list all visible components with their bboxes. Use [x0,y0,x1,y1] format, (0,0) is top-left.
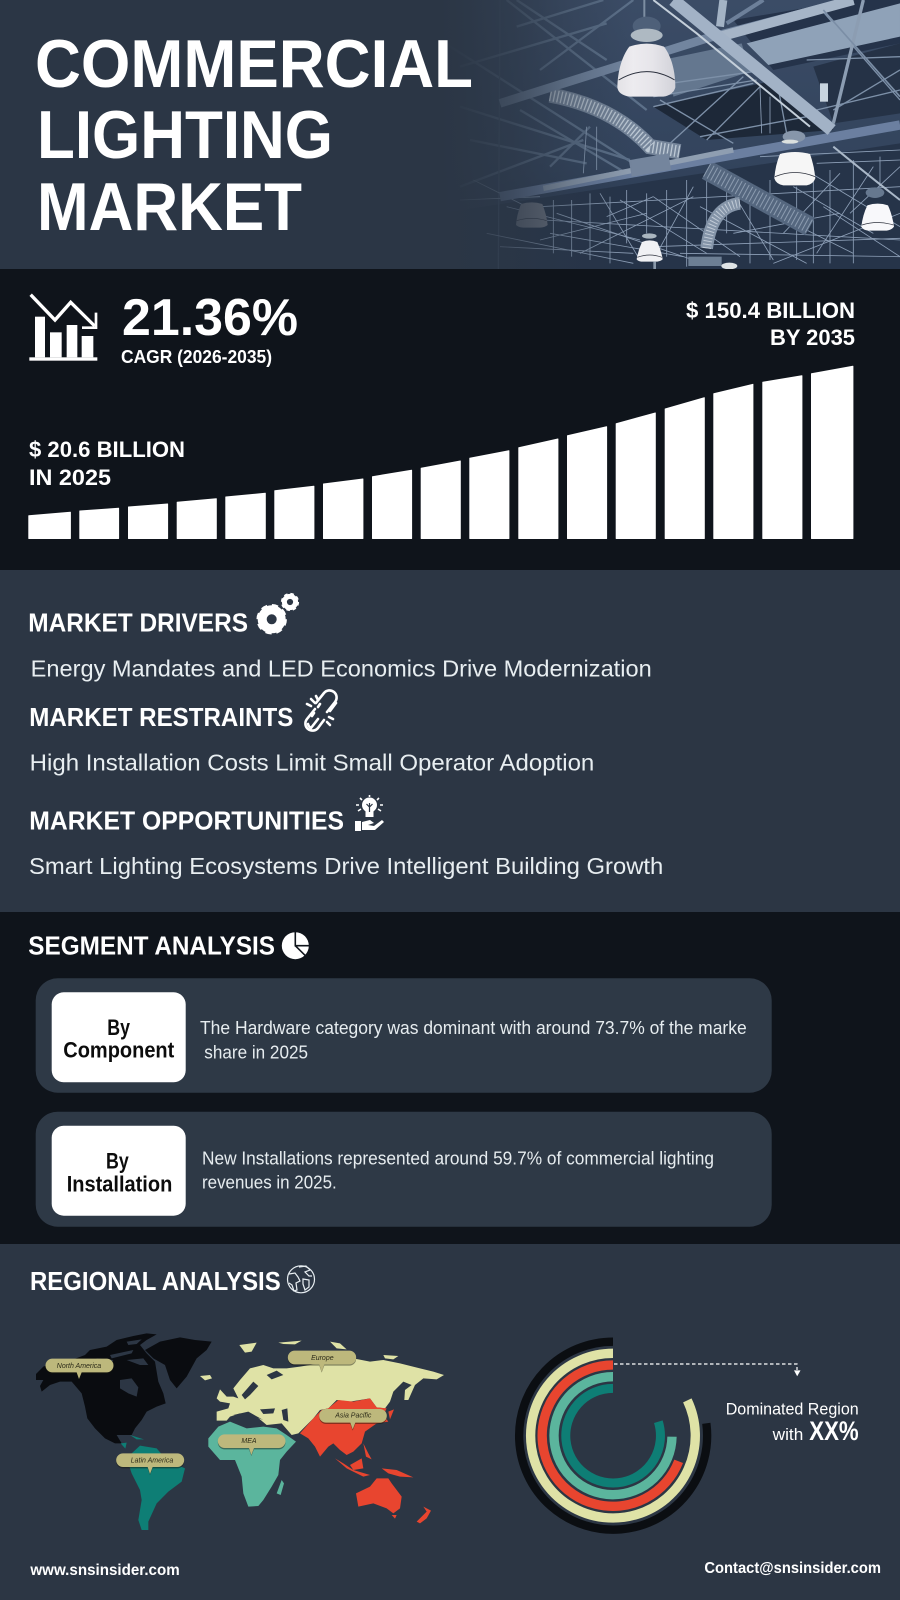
small lower lamp [637,233,663,269]
card text: hardware share: The Hardware category was dominant with around 73.7% of the marke [200,1018,747,1038]
callout: Latin America [116,1453,184,1475]
CAGR value: 21.36% [122,289,298,347]
card: by installation [36,1112,772,1227]
callout: Europe: Europe [311,1355,334,1362]
label box: by installation: Installation [67,1172,172,1197]
lamp right middle [774,131,815,185]
label box: by installation: By [106,1148,129,1173]
start value label: $ 20.6 BILLION [29,437,185,462]
large lamp [617,0,675,97]
panel: regional analysis [0,1244,900,1600]
title: MARKET [37,169,302,245]
title: COMMERCIAL [35,26,473,102]
callout: dominated region [726,1399,859,1446]
footer: website: www.snsinsider.com [29,1562,180,1579]
end value label: BY 2035 [770,325,855,350]
card text: new installations share: revenues in 2025. [202,1172,337,1192]
restraint text: High Installation Costs Limit Small Operator Adoption [30,750,594,776]
footer: contact: Contact@snsinsider.com [704,1560,881,1577]
callout: dominated region: with [772,1425,803,1444]
heading: market drivers: MARKET DRIVERS [28,608,248,638]
map region: Latin America [121,1435,185,1530]
callout: North America [45,1359,113,1380]
callout: Asia Pacific: Asia Pacific [334,1413,372,1420]
end value label [686,298,855,350]
label box: by component [52,992,186,1082]
callout: Europe [288,1351,356,1373]
label box: by installation [52,1126,186,1216]
icon: bar chart with trend arrow [29,295,97,361]
heading: regional analysis: REGIONAL ANALYSIS [30,1266,281,1296]
icon: lightbulb in hand [355,795,384,831]
start value label [29,437,185,490]
callout: dominated region: Dominated Region [726,1399,859,1418]
icon: globe [288,1266,314,1293]
bar chart: market growth [29,366,853,538]
opportunity text: Smart Lighting Ecosystems Drive Intelligent Building Growth [29,853,663,879]
map region: Asia Pacific [300,1398,431,1523]
icon: pie chart [282,932,309,959]
card text: hardware share [200,1018,747,1062]
lamp far right [861,187,894,231]
dim lamp [516,202,548,228]
header band background [0,0,900,269]
map region: North America [36,1333,212,1443]
icon: gears [258,594,298,633]
heading: market opportunities: MARKET OPPORTUNITIES [29,805,344,835]
callout: North America: North America [57,1363,101,1370]
card: by component [36,978,772,1093]
icon: broken chain [305,690,337,731]
radial bar chart [519,1342,707,1530]
dashed leader arrow [614,1364,800,1375]
panel: market size band [0,269,900,570]
map region: Middle East and Africa [208,1422,296,1507]
heading: segment analysis: SEGMENT ANALYSIS [28,931,275,961]
label box: by component: Component [63,1037,175,1062]
driver text: Energy Mandates and LED Economics Drive Modernization [31,656,652,682]
card text: hardware share: share in 2025 [204,1042,308,1062]
card text: new installations share [202,1148,714,1192]
start value label: IN 2025 [29,465,111,490]
callout: MEA [218,1434,285,1456]
callout: Latin America: Latin America [131,1458,173,1465]
label box: by component: By [107,1015,131,1040]
callout: MEA: MEA [241,1438,257,1445]
main beams [747,3,900,65]
end value label: $ 150.4 BILLION [686,298,855,323]
panel: market dynamics [0,570,900,912]
title [35,26,473,245]
title: LIGHTING [37,97,333,173]
panel: segment analysis [0,912,900,1244]
heading: market restraints: MARKET RESTRAINTS [29,702,293,732]
callout: Asia Pacific [319,1409,387,1431]
map region: Europe and North Asia [200,1341,444,1435]
world map [36,1333,444,1530]
header photo: ceiling trusses with hanging lamps [440,0,900,269]
CAGR label: CAGR (2026-2035) [121,347,272,367]
card text: new installations share: New Installations represented around 59.7% of commercial lighting [202,1148,714,1168]
duct segments [550,95,680,152]
callout: dominated region: XX% [809,1416,859,1446]
